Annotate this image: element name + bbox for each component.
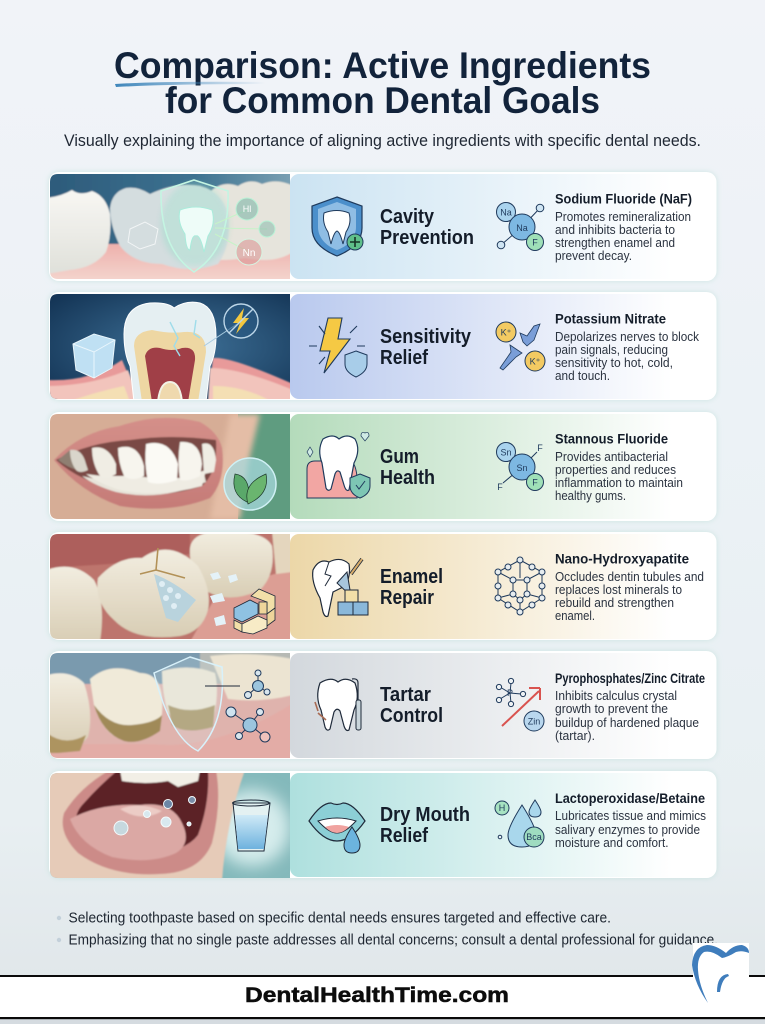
card background [49,412,716,521]
label: Relief [380,824,428,847]
molecule icon: potassium nitrate [496,322,545,371]
label: Gum [380,445,419,468]
label [380,803,470,847]
icon: lips with droplet [309,803,365,853]
molecule icon: pyrophosphate and zinc [496,678,544,731]
molecule icon: pyrophosphate and zinc: P [507,688,513,698]
ingredient text: Sodium Fluoride (NaF) [555,192,692,206]
callout line [205,686,240,687]
logo: blue tooth [692,943,749,1003]
molecule icon: droplets: H [499,803,505,813]
ingredient text [555,192,692,263]
icon: tooth and gum [307,432,370,498]
panel: gum health [49,412,716,521]
label: Repair [380,586,434,609]
ingredient text: inflammation to maintain [555,476,683,490]
ingredient text: Nano-Hydroxyapatite [555,552,689,566]
ingredient text: sensitivity to hot, cold, [555,356,673,370]
ingredient text: Pyrophosphates/Zinc Citrate [555,671,705,686]
icon: shield with tooth [312,197,363,256]
card background [49,532,716,640]
ingredient text: and inhibits bacteria to [555,223,675,237]
ingredient text: Promotes remineralization [555,210,691,224]
ingredient text: moisture and comfort. [555,836,668,850]
leaf bubble [224,458,276,510]
molecule icon: stannous fluoride: Sn [500,448,512,458]
molecule icon: sodium fluoride: F [532,238,538,248]
label: Prevention [380,226,474,249]
label [380,445,435,489]
photo: teeth with tartar [47,650,293,761]
lips [54,418,223,509]
molecule icon: hydroxyapatite lattice [495,557,545,615]
photo: cracked molar with mineral blocks [47,531,293,642]
label: Sensitivity [380,325,472,348]
label [380,325,472,369]
ingredient text: and touch. [555,369,610,383]
ingredient text: pain signals, reducing [555,343,668,357]
subtitle: Visually explaining the importance of aligning active ingredients with specific dental needs. [64,131,701,150]
card background [49,172,716,281]
photo: open mouth and water glass [47,770,290,881]
shield outline [154,657,222,751]
tooth [124,302,216,402]
ingredient text [555,671,705,743]
photo: smile with leaf bubble [50,414,290,519]
molecule icon: sodium fluoride: Na [516,223,528,233]
footnote bullets [57,910,718,948]
icon: lightning with shield [309,318,367,377]
photo: tooth cross-section with ice [47,294,293,402]
label: Cavity [380,205,435,228]
label: Dry Mouth [380,803,470,826]
footnote bullets: Selecting toothpaste based on specific dental needs ensures targeted and effective care. [68,910,611,926]
ingredient text: (tartar). [555,729,595,743]
molecule icon: stannous fluoride: F [537,443,543,453]
molecule icon: droplets: Bca [526,832,542,842]
card background [49,771,716,878]
molecule icon: sodium fluoride [496,202,544,250]
ingredient text: growth to prevent the [555,702,668,716]
card background [49,292,716,400]
panel: sensitivity relief [47,292,716,402]
label: Tartar [380,683,431,706]
ingredient text: rebuild and strengthen [555,596,674,610]
water glass [233,803,270,851]
molecule icon: stannous fluoride: F [497,482,503,492]
no-pain circle [204,322,240,346]
title: for Common Dental Goals [165,80,600,121]
ingredient text: enamel. [555,609,595,623]
label: Relief [380,346,428,369]
ingredient text: Lactoperoxidase/Betaine [555,791,705,806]
panel: dry mouth relief [47,770,716,881]
ingredient text: Inhibits calculus crystal [555,689,677,703]
footer band: DentalHealthTime.com [245,984,509,1007]
panel: tartar control [47,650,716,761]
ingredient text: Depolarizes nerves to block [555,330,700,344]
molecule icon: potassium nitrate: K⁺ [530,356,541,366]
ingredient text: salivary enzymes to provide [555,823,700,837]
ingredient text: healthy gums. [555,489,626,503]
photo: tooth shield: Hl [243,204,251,214]
molecule icon: potassium nitrate: K⁺ [501,328,512,338]
title underline swoosh [115,82,265,87]
ingredient text: Potassium Nitrate [555,312,666,326]
ingredient text [555,791,706,850]
mineral blocks [234,589,275,634]
molecule icon: stannous fluoride [496,442,544,492]
footer band [0,975,765,1024]
ingredient text: Lubricates tissue and mimics [555,809,706,823]
photo: tooth shield: Nn [243,248,255,259]
ingredient text: buildup of hardened plaque [555,716,699,730]
shield outline [161,180,228,272]
ingredient text: replaces lost minerals to [555,583,682,597]
ingredient text: prevent decay. [555,249,632,263]
teeth [82,474,206,495]
label: Enamel [380,565,443,588]
title: Comparison: Active Ingredients [114,45,651,86]
ingredient text [555,312,700,383]
mineral fill [154,574,196,622]
photo: tooth shield [47,171,293,282]
panel: enamel repair [47,531,716,642]
panel: cavity prevention [47,171,716,282]
ingredient text [555,552,704,623]
arrow [502,688,540,726]
label: Control [380,704,443,727]
molecule icon: droplets [495,800,544,847]
label [380,565,443,609]
icon: cracked tooth, trowel, bricks [313,559,368,616]
tooth inside shield [179,207,213,252]
molecule icon: stannous fluoride: F [532,478,538,488]
molecules [226,670,270,742]
footnote bullets: Emphasizing that no single paste addresses all dental concerns; consult a dental professional for guidance. [68,932,718,948]
molecule icon: sodium fluoride: Na [500,208,512,218]
ice cube [73,334,115,378]
label [380,683,443,727]
ingredient text: strengthen enamel and [555,236,675,250]
ingredient text: Occludes dentin tubules and [555,570,704,584]
title [114,45,651,121]
ingredient text: Stannous Fluoride [555,432,668,446]
label: Health [380,466,435,489]
molecule icon: pyrophosphate and zinc: Zin [528,716,540,726]
molecule icon: stannous fluoride: Sn [516,463,528,473]
ingredient text [555,432,683,503]
icon: tooth and dental probe [315,679,361,730]
ingredient text: properties and reduces [555,463,676,477]
card background [49,651,716,759]
label [380,205,474,249]
ingredient text: Provides antibacterial [555,450,668,464]
ion bubbles [236,198,258,220]
